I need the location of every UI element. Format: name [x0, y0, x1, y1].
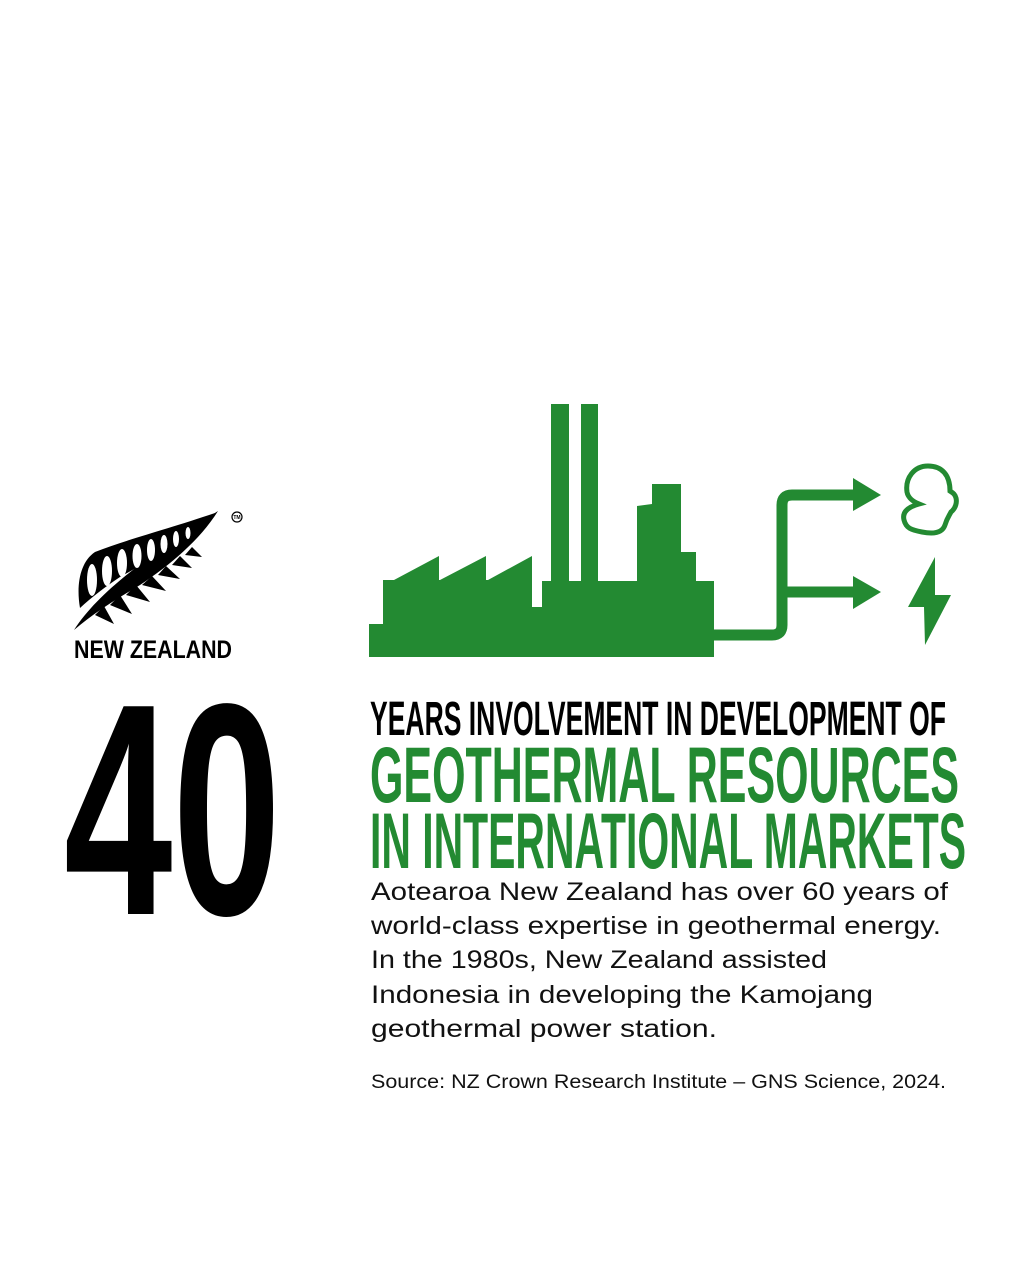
icon: lightning bolt [908, 557, 951, 645]
icon: geothermal power plant [369, 404, 956, 657]
big number 40: 40 [64, 641, 281, 978]
body text: Aotearoa New Zealand has over 60 years of [371, 878, 948, 906]
pipe and arrows [714, 478, 881, 635]
body text [370, 878, 948, 1043]
trademark symbol: TM [233, 515, 241, 521]
trademark symbol [232, 512, 242, 522]
body text: Indonesia in developing the Kamojang [371, 981, 873, 1009]
icon: steam cloud [904, 466, 956, 533]
body text: world-class expertise in geothermal energy. [370, 912, 941, 940]
source note: Source: NZ Crown Research Institute – GNS Science, 2024. [371, 1072, 946, 1093]
logo: New Zealand fern [74, 511, 242, 664]
logo wordmark: NEW ZEALAND [74, 636, 232, 664]
body text: geothermal power station. [371, 1015, 717, 1043]
icon: silver fern [74, 511, 218, 630]
body text: In the 1980s, New Zealand assisted [371, 946, 827, 974]
factory silhouette [369, 404, 714, 657]
headline [370, 693, 966, 885]
